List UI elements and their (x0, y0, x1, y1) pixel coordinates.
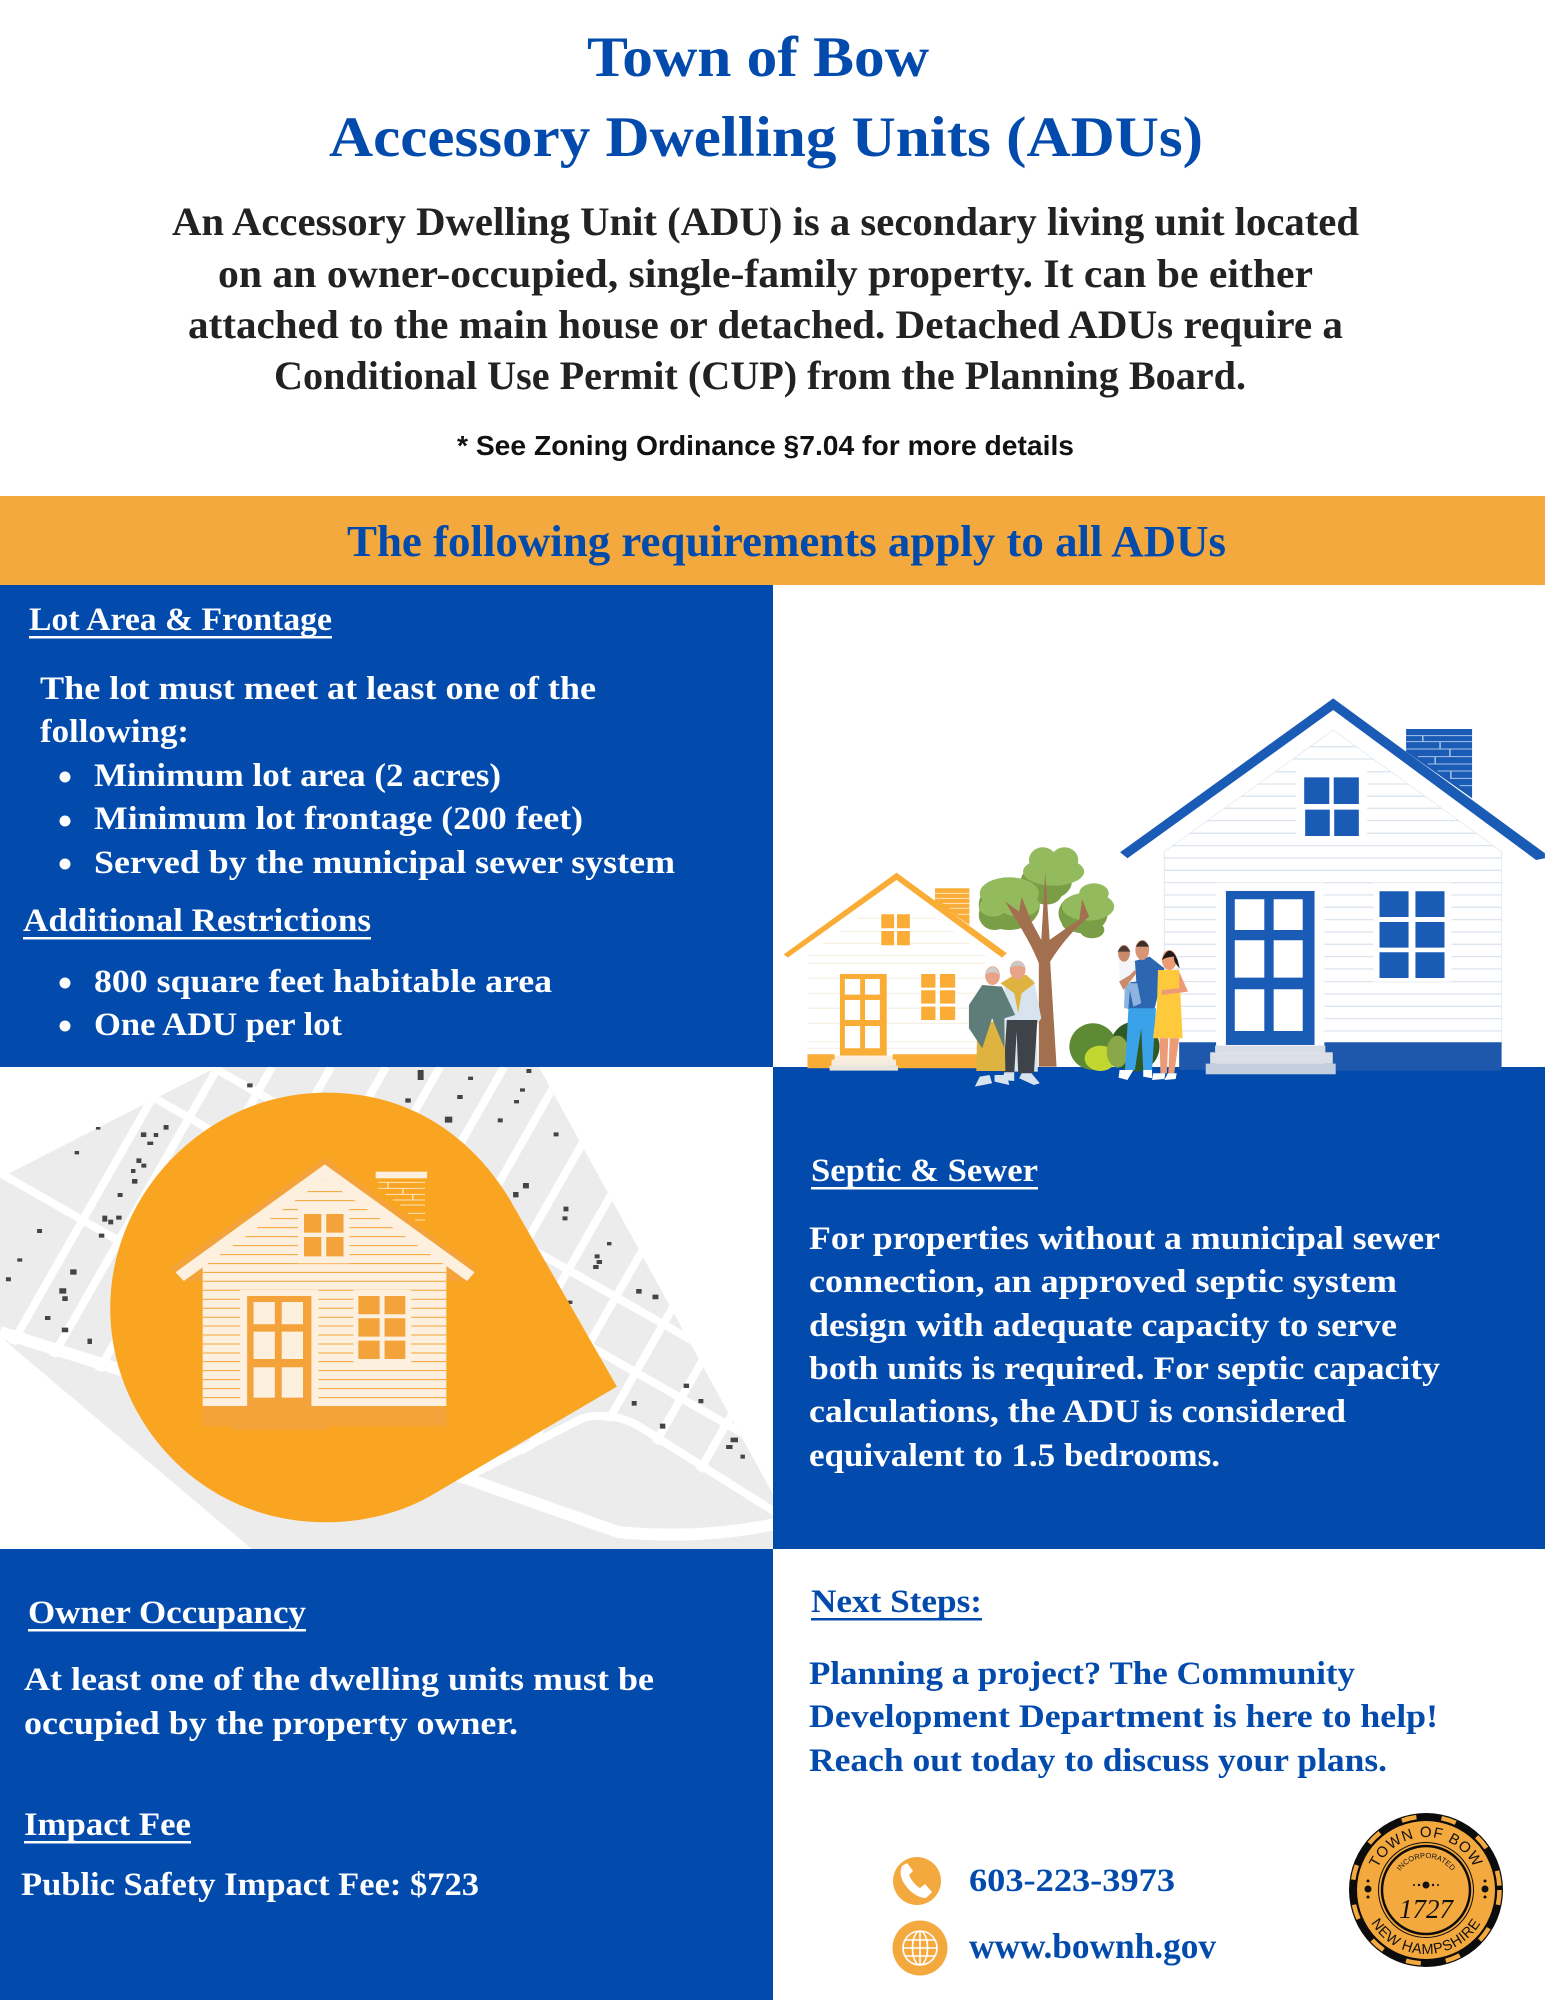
septic text (809, 1221, 1441, 1474)
heading: septic: Septic & Sewer (811, 1153, 1038, 1189)
icon: phone (893, 1857, 941, 1905)
panel: owner occupancy and impact fee (0, 1549, 773, 2000)
icon: location pin with house (110, 1093, 617, 1522)
heading: next steps: Next Steps: (811, 1584, 982, 1620)
heading: owner occupancy: Owner Occupancy (28, 1595, 307, 1631)
map markers (6, 1069, 745, 1459)
lot text: Minimum lot frontage (200 feet) (94, 801, 583, 837)
intro paragraph: attached to the main house or detached. Detached ADUs require a (188, 302, 1343, 347)
icon: town seal: INCORPORATED (1396, 1852, 1455, 1871)
lot text: Served by the municipal sewer system (94, 845, 675, 881)
heading: impact fee: Impact Fee (24, 1807, 191, 1843)
next steps text: Reach out today to discuss your plans. (809, 1743, 1387, 1779)
intro paragraph: on an owner-occupied, single-family property. It can be either (218, 251, 1313, 296)
zoning note: * See Zoning Ordinance §7.04 for more details (457, 430, 1074, 461)
illustration: street map with location pin (0, 1067, 773, 1549)
illustration: two houses, tree and families (784, 698, 1545, 1087)
contact: website: www.bownh.gov (969, 1926, 1216, 1966)
panel: septic and sewer (773, 1067, 1545, 1549)
icon: town seal (1349, 1813, 1503, 1967)
lot text: following: (40, 714, 189, 750)
intro paragraph: Conditional Use Permit (CUP) from the Planning Board. (274, 353, 1246, 398)
lot text: Minimum lot area (2 acres) (94, 758, 501, 794)
septic text: design with adequate capacity to serve (809, 1308, 1397, 1344)
requirements banner (0, 496, 1545, 585)
next steps text: Development Department is here to help! (809, 1699, 1438, 1735)
header: title and intro (172, 26, 1359, 461)
icon: shrub (1069, 1022, 1159, 1072)
lot text (40, 671, 675, 881)
restrictions list (60, 964, 552, 1043)
icon: town seal: NEW HAMPSHIRE (1372, 1918, 1480, 1954)
next steps text: Planning a project? The Community (809, 1656, 1356, 1692)
lot text: The lot must meet at least one of the (40, 671, 596, 707)
septic text: equivalent to 1.5 bedrooms. (809, 1438, 1220, 1474)
next steps text (809, 1656, 1438, 1779)
requirements banner: The following requirements apply to all ADUs (347, 517, 1226, 566)
septic text: both units is required. For septic capacity (809, 1351, 1441, 1387)
icon: tree (979, 847, 1114, 1067)
icon: town seal: TOWN OF BOW (1368, 1826, 1483, 1865)
icon: town seal: 1727 (1399, 1894, 1454, 1924)
title (329, 26, 1203, 169)
icon: older couple (969, 961, 1041, 1087)
intro paragraph: An Accessory Dwelling Unit (ADU) is a secondary living unit located (172, 199, 1359, 244)
icon: young family (1118, 940, 1188, 1080)
restrictions list: 800 square feet habitable area (94, 964, 552, 1000)
owner text: occupied by the property owner. (24, 1706, 518, 1742)
title: Town of Bow (587, 26, 929, 89)
panel: lot area and restrictions (0, 585, 773, 1067)
heading: additional restrictions: Additional Restrictions (23, 903, 371, 939)
restrictions list: One ADU per lot (94, 1007, 342, 1043)
contact: phone number: 603-223-3973 (969, 1863, 1175, 1899)
septic text: calculations, the ADU is considered (809, 1394, 1346, 1430)
icon: accessory dwelling (784, 873, 1007, 1071)
septic text: connection, an approved septic system (809, 1264, 1397, 1300)
owner text: At least one of the dwelling units must be (24, 1662, 654, 1698)
intro paragraph (172, 199, 1359, 398)
icon: main house (1120, 698, 1545, 1074)
owner text (24, 1662, 654, 1742)
heading: lot area: Lot Area & Frontage (29, 602, 332, 638)
impact fee text: Public Safety Impact Fee: $723 (21, 1867, 479, 1903)
panel: next steps (809, 1584, 1503, 1976)
icon: globe (892, 1920, 948, 1976)
septic text: For properties without a municipal sewer (809, 1221, 1440, 1257)
title: Accessory Dwelling Units (ADUs) (329, 106, 1203, 169)
